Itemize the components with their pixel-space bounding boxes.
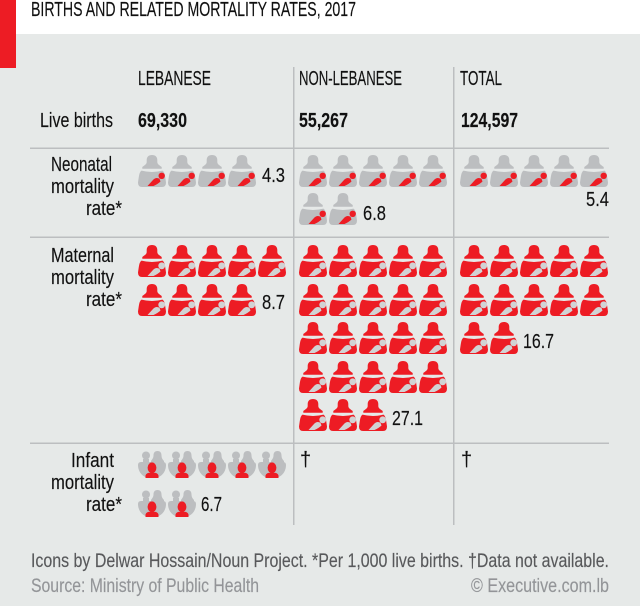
value: infant Lebanese: 6.7 xyxy=(201,494,222,516)
row label: Maternal mortality rate: rate* xyxy=(86,289,122,311)
row label: Infant mortality rate: mortality xyxy=(51,472,114,494)
column heading: Non-Lebanese: NON-LEBANESE xyxy=(299,68,402,90)
dagger: infant Total: † xyxy=(461,449,472,471)
value: maternal Lebanese: 8.7 xyxy=(262,292,285,314)
row label: Infant mortality rate: rate* xyxy=(86,494,122,516)
column heading: Total: TOTAL xyxy=(460,68,502,90)
row label: Maternal mortality rate: mortality xyxy=(51,267,114,289)
row label: Neonatal mortality rate xyxy=(51,154,122,220)
copyright: © Executive.com.lb xyxy=(471,575,609,597)
row label: Maternal mortality rate: Maternal xyxy=(51,245,114,267)
column heading: Lebanese: LEBANESE xyxy=(138,68,211,90)
live births Non-Lebanese: 55,267 xyxy=(299,110,348,132)
value: neonatal Lebanese: 4.3 xyxy=(262,165,285,187)
live births Lebanese: 69,330 xyxy=(138,110,187,132)
source: Source: Ministry of Public Health xyxy=(31,575,259,597)
row label: Neonatal mortality rate: Neonatal xyxy=(51,154,112,176)
row label: Maternal mortality rate xyxy=(51,245,122,311)
icons: neonatal Non-Lebanese xyxy=(299,155,447,225)
row label: Infant mortality rate xyxy=(51,450,122,516)
icons: infant Lebanese xyxy=(138,451,286,517)
row label: Live births: Live births xyxy=(40,110,113,132)
icons: neonatal Lebanese xyxy=(138,155,256,187)
row label: Neonatal mortality rate: rate* xyxy=(86,198,122,220)
value: neonatal Total: 5.4 xyxy=(586,189,609,211)
value: neonatal Non-Lebanese: 6.8 xyxy=(363,203,386,225)
icons: maternal Total xyxy=(460,245,608,354)
dagger: infant Non-Lebanese: † xyxy=(300,449,311,471)
value: maternal Non-Lebanese: 27.1 xyxy=(392,408,423,430)
red accent bar xyxy=(0,0,16,68)
row label: Neonatal mortality rate: mortality xyxy=(51,176,114,198)
live births Total: 124,597 xyxy=(461,110,518,132)
row label: Infant mortality rate: Infant xyxy=(71,450,114,472)
value: maternal Total: 16.7 xyxy=(523,331,554,353)
icons: maternal Non-Lebanese xyxy=(299,245,447,431)
header band xyxy=(0,0,640,34)
icons: maternal Lebanese xyxy=(138,245,286,316)
icons: neonatal Total xyxy=(460,155,608,187)
